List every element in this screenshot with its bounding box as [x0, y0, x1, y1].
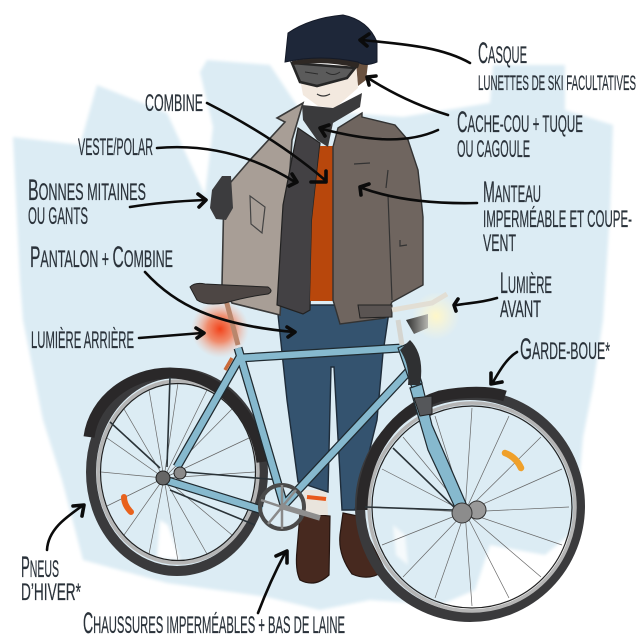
white streak in front wheel	[393, 525, 408, 565]
rear wheel	[89, 373, 263, 571]
jacket hem behind saddle	[230, 285, 280, 313]
person	[210, 15, 423, 583]
front hub	[468, 501, 486, 519]
seat stay reflector	[225, 358, 232, 370]
brake	[414, 396, 432, 416]
seat post	[226, 300, 238, 345]
orange shirt	[310, 146, 333, 301]
label: manteau: MANTEAU	[483, 176, 541, 209]
handlebar and lever	[392, 294, 447, 310]
arrow: veste	[157, 147, 297, 186]
front mudguard	[362, 392, 505, 510]
label: pneus: PNEUS	[21, 551, 59, 584]
rear reflector	[124, 497, 131, 512]
arrow: lunettes	[367, 76, 448, 115]
label: mitaines: BONNES MITAINES	[28, 174, 146, 207]
label: hiver: D’HIVER*	[21, 579, 81, 606]
socks	[303, 490, 328, 515]
labels: CHAUSSURES IMPERMÉABLES + BAS DE LAINE	[83, 607, 345, 640]
labels: OU GANTS	[28, 203, 88, 230]
jacket seams	[354, 163, 407, 300]
arrow: manteau	[360, 184, 477, 203]
front spokes	[375, 408, 569, 606]
front wheel	[360, 392, 580, 617]
rear mudguard	[89, 373, 262, 462]
mouth	[317, 94, 330, 96]
trousers	[277, 305, 390, 510]
front hub centre	[452, 503, 472, 523]
rear tire	[91, 373, 263, 571]
bicycle	[89, 283, 580, 617]
fork	[410, 384, 468, 514]
arrow: cache-cou	[320, 125, 438, 139]
front tire	[360, 395, 580, 617]
arrow: pantalon	[145, 272, 295, 337]
face	[298, 64, 358, 108]
label: avant: AVANT	[500, 296, 541, 323]
goggles	[292, 63, 355, 86]
beige jacket panel	[222, 103, 303, 315]
dark fleece	[277, 128, 320, 314]
front lamp	[406, 314, 428, 334]
arrow: lumière avant	[454, 298, 497, 311]
front light glow	[412, 292, 460, 340]
front rim inner line	[372, 406, 572, 608]
rear hub	[156, 471, 170, 485]
chainring arms	[261, 485, 303, 529]
front reflector	[505, 453, 521, 468]
rear cog	[174, 467, 186, 479]
rear rim inner line	[100, 384, 256, 560]
arrow: chaussures	[258, 551, 287, 613]
helmet	[285, 15, 377, 64]
arrow: garde-boue	[491, 352, 517, 384]
cable housing	[400, 340, 421, 385]
brown jacket	[333, 113, 423, 324]
label: lumière avant: LUMIÈRE	[500, 267, 552, 300]
ear	[356, 62, 368, 86]
frame outline	[165, 348, 408, 510]
rear light red glow	[191, 300, 249, 358]
handlebar grip	[358, 305, 392, 318]
mitten	[210, 176, 233, 220]
sock stripe	[307, 497, 326, 499]
label: vent: VENT	[483, 230, 516, 257]
saddle	[190, 283, 271, 304]
label: pantalon: PANTALON + COMBINE	[30, 241, 173, 274]
label: combine: COMBINE	[145, 90, 203, 117]
chainring	[260, 485, 304, 529]
rear rim	[98, 381, 258, 563]
arrow: pneus	[47, 505, 84, 550]
arrow: casque	[360, 34, 470, 63]
label: casque: CASQUE	[478, 37, 527, 70]
closed eyes	[305, 72, 340, 74]
arrow: lumière arrière	[139, 328, 204, 338]
labels: VESTE/POLAR	[78, 134, 153, 161]
rear spokes	[101, 383, 255, 561]
white streak in rear wheel	[157, 520, 180, 560]
arrow: combine	[207, 103, 326, 182]
labels: LUMIÈRE ARRIÈRE	[31, 327, 134, 354]
stem	[398, 320, 402, 345]
jacket pocket	[250, 196, 265, 233]
front rim	[369, 403, 575, 611]
labels: OU CAGOULE	[457, 136, 530, 163]
mudguard stays	[110, 377, 457, 525]
arrow: mitaines	[130, 194, 206, 207]
frame colour	[165, 348, 408, 510]
neck warmer	[302, 93, 362, 147]
right shoe	[340, 513, 385, 577]
hair under helmet	[292, 58, 360, 68]
arrows	[47, 34, 517, 613]
left shoe	[296, 513, 330, 583]
head tube	[398, 343, 422, 388]
crank	[280, 506, 320, 518]
